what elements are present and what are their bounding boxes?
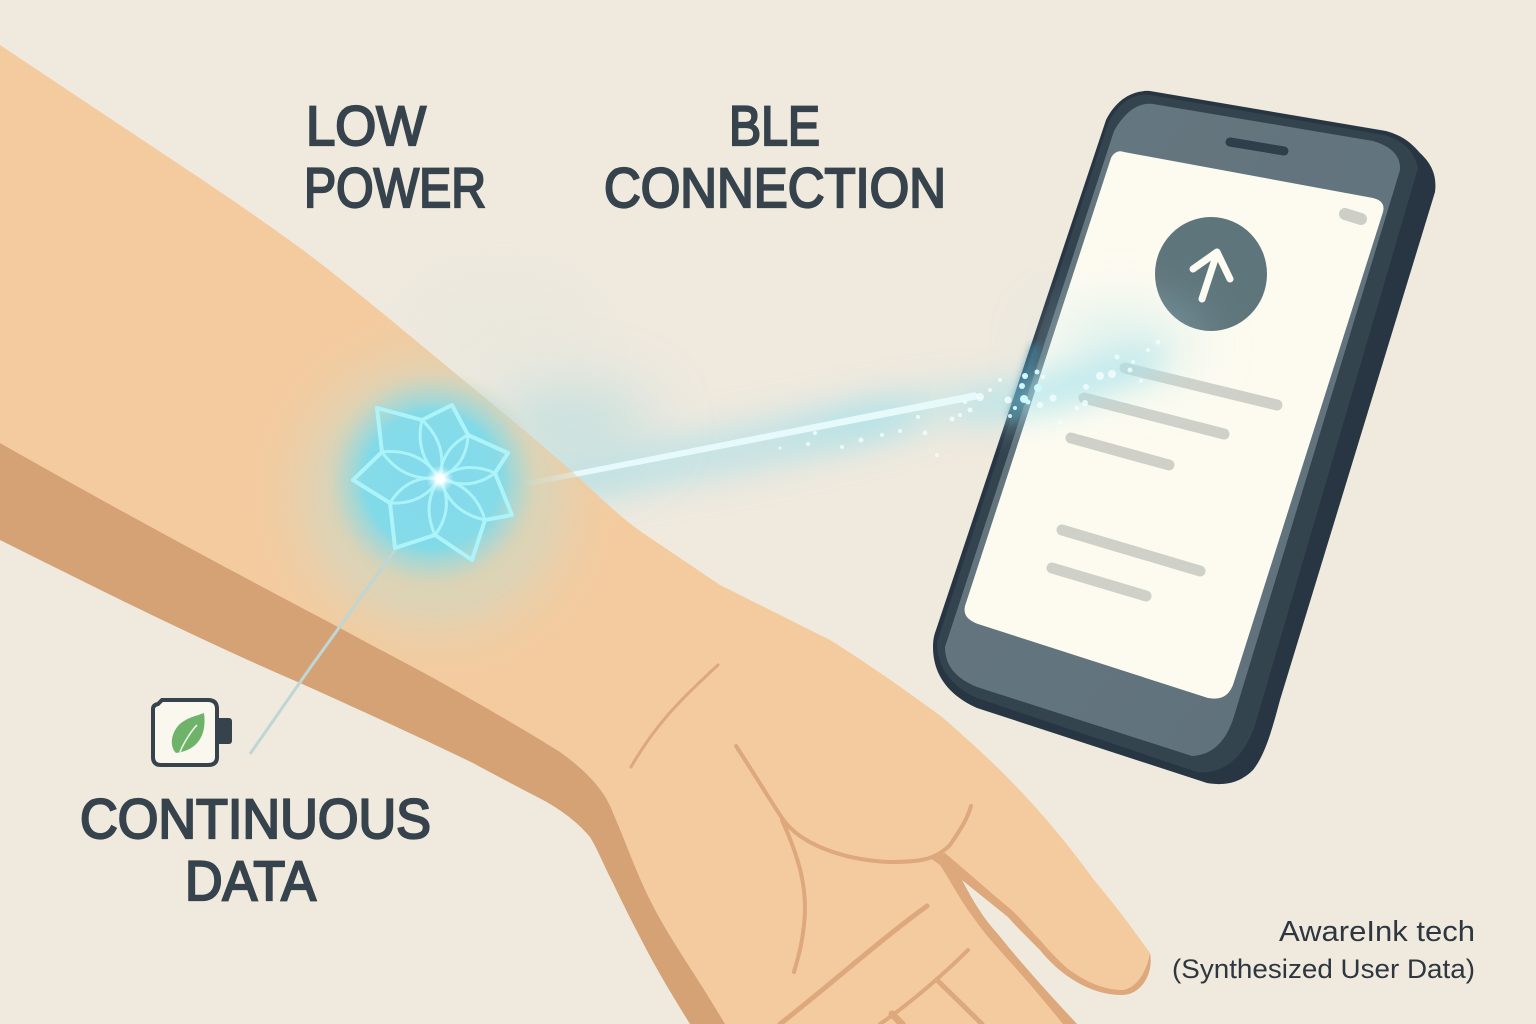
battery body: [153, 700, 217, 765]
palm creases: [631, 665, 982, 1024]
flower outline: [353, 405, 512, 560]
arm underside shadow band: [0, 400, 760, 1024]
phone screen: [965, 151, 1384, 699]
flower swirl arcs: [382, 420, 495, 535]
leaf: [172, 713, 205, 753]
phone face: [945, 104, 1400, 756]
heading: low power: LOW: [306, 94, 426, 157]
illustration: arm and hand: [0, 45, 1151, 1024]
arm, palm and thumb: [0, 45, 1151, 1024]
bright particles at phone edge: [1013, 370, 1042, 410]
heading: low power: [304, 94, 486, 219]
phone speaker: [1230, 142, 1284, 151]
connector line to battery: [250, 550, 395, 754]
credit text: [1172, 916, 1475, 984]
credit text: (Synthesized User Data): [1172, 954, 1475, 984]
phone bezel: [937, 95, 1418, 772]
upload button: [1155, 217, 1267, 331]
bezel highlight: [1012, 345, 1036, 420]
icon: battery with leaf: [153, 700, 232, 765]
background glow behind arm: [410, 290, 1000, 510]
phone body: [933, 91, 1435, 784]
heading: continuous data: [80, 787, 431, 912]
heading: continuous data: DATA: [185, 849, 317, 912]
heading: ble connection: BLE: [729, 94, 820, 157]
flower tattoo: [353, 405, 512, 560]
heading: ble connection: CONNECTION: [604, 156, 946, 219]
screen text lines: [1052, 368, 1277, 596]
thumb edge and finger gap outline: [930, 853, 1151, 1024]
phone: [933, 91, 1435, 784]
tattoo halo on skin: [289, 349, 582, 642]
tattoo core spark: [426, 465, 454, 493]
beam glow over phone: [960, 313, 1195, 425]
signal line: [525, 393, 980, 485]
battery nub: [215, 718, 232, 744]
heading: low power: POWER: [304, 156, 486, 219]
credit text: AwareInk tech: [1279, 916, 1475, 948]
signal particles: [778, 340, 1160, 457]
heading: continuous data: CONTINUOUS: [80, 787, 431, 850]
status pill: [1345, 214, 1361, 219]
tattoo glow: [320, 368, 544, 592]
heading: ble connection: [604, 94, 946, 219]
